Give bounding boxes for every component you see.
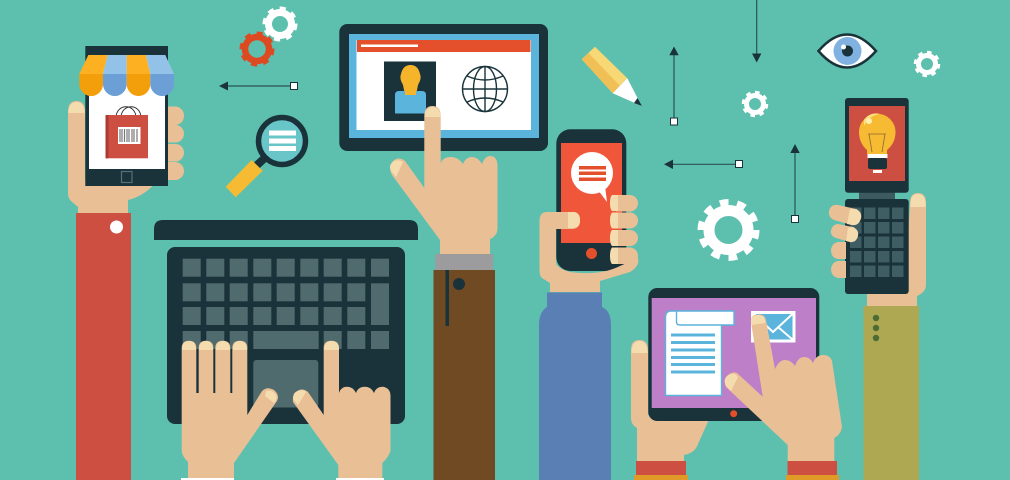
icon: eye — [818, 34, 876, 68]
icon: large white gear — [701, 202, 756, 258]
phone screen — [561, 143, 622, 243]
icon: light bulb — [859, 113, 896, 173]
panel: top tablet — [339, 24, 548, 151]
icon: shopping bag — [106, 107, 148, 158]
hand holding shop phone — [68, 101, 184, 216]
document icon — [666, 311, 734, 396]
hand behind phone — [867, 193, 926, 306]
icon: globe — [462, 66, 508, 112]
laptop screen edge — [154, 220, 418, 240]
phone upper — [845, 98, 909, 193]
right hand — [725, 314, 842, 461]
phone body — [556, 129, 626, 271]
phone keypad — [845, 199, 909, 294]
red header bar — [357, 40, 530, 52]
hand: pointing at tablet — [390, 106, 498, 254]
phone screen — [89, 55, 165, 169]
red dot — [730, 410, 737, 417]
icon: white gear top — [264, 8, 296, 40]
laptop base — [167, 247, 405, 424]
tablet body — [339, 24, 548, 151]
panel: shop phone in hand — [68, 46, 184, 216]
chat bubble — [571, 152, 613, 202]
left hand behind tablet — [631, 340, 711, 461]
home button — [586, 248, 597, 259]
hand: left on keyboard — [181, 341, 278, 480]
hinge — [859, 192, 895, 200]
icon: pencil — [582, 47, 642, 106]
arrow: left centre — [664, 160, 742, 169]
hand: right on keyboard — [293, 341, 390, 480]
panel: laptop — [154, 220, 418, 424]
icon: red gear — [242, 34, 272, 64]
panel: lower tablet with hands — [631, 288, 842, 480]
sleeve: red with button — [76, 213, 131, 480]
awning — [79, 55, 174, 96]
keyboard keys — [183, 259, 389, 349]
trackpad — [253, 360, 318, 408]
sleeve: blue — [539, 292, 611, 480]
fingers on phone — [829, 205, 861, 278]
envelope icon — [751, 311, 796, 342]
tablet body — [648, 288, 819, 421]
arrow: down from top — [752, 0, 761, 62]
icon: small white gear centre — [744, 92, 766, 116]
phone red screen — [849, 106, 905, 181]
panel: chat phone in hand — [540, 129, 638, 292]
arrow: left near magnifier — [219, 82, 298, 90]
profile picture — [384, 62, 436, 121]
cuffs — [634, 461, 839, 480]
white page — [356, 40, 531, 130]
phone body — [85, 46, 168, 186]
hand holding phone — [540, 195, 638, 292]
tablet blue screen — [349, 34, 539, 138]
purple screen — [652, 298, 816, 408]
sleeve: olive with buttons — [864, 306, 919, 480]
home button — [122, 172, 132, 182]
arrow: up right — [790, 144, 800, 222]
panel: flip phone in hand — [829, 98, 926, 306]
sleeve: grey cuff and brown jacket — [434, 254, 495, 480]
arrow: up left — [669, 46, 679, 125]
icon: magnifying glass — [226, 118, 306, 197]
icon: small white gear right — [916, 52, 938, 76]
